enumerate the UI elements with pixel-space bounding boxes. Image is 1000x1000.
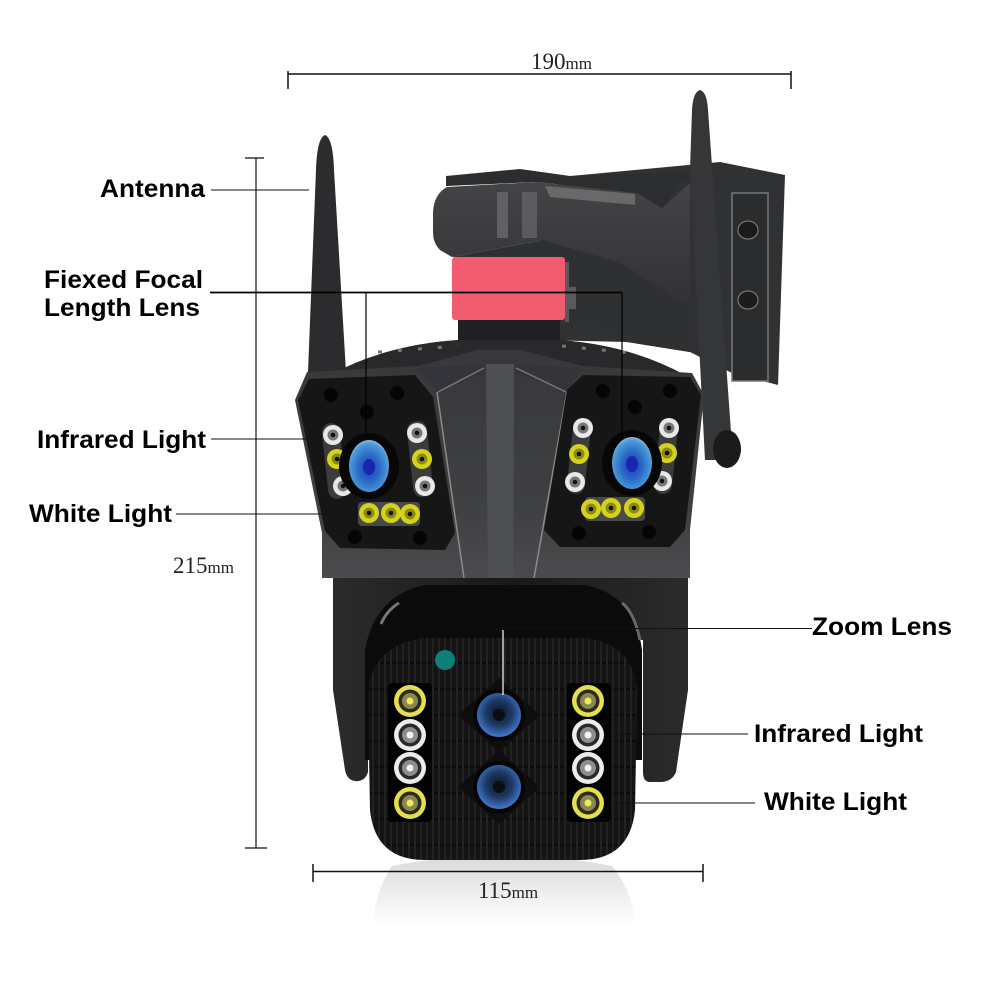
callout: white light left: White Light [29,500,173,528]
right panel screw holes [572,384,677,540]
callout: zoom lens: Zoom Lens [812,613,952,641]
reflection under camera [372,856,636,925]
pink label block [452,257,565,320]
callout: infrared light right: Infrared Light [754,720,924,748]
lower pan housing [333,578,688,782]
antenna knob [713,430,741,468]
status indicator [435,650,455,670]
main gray head body [295,350,704,578]
left LED strip [388,683,432,822]
right panel side LEDs [565,417,679,495]
callout: fixed focal length lens: Fiexed Focal [44,266,203,294]
screw beside pink block [565,262,576,322]
callout: antenna: Antenna [100,175,206,203]
dimension: height 215mm [173,158,267,848]
right panel bottom LEDs [581,497,645,521]
callout: fixed focal length lens [44,266,622,436]
left panel bottom LEDs [358,502,420,526]
left panel screw holes [324,386,427,545]
zoom head front plate [368,638,637,860]
top zoom lens [458,678,540,752]
right lens [602,430,662,496]
callout: fixed focal length lens: Length Lens [44,294,200,322]
dimension: width 115mm [313,864,703,903]
dimension: width 190mm [288,49,791,89]
callout: infrared light left: Infrared Light [37,426,207,454]
callout: white light right: White Light [764,788,908,816]
dimension: width 190mm: 190mm [531,49,592,74]
right LED strip [567,683,611,822]
center ridge [418,364,583,578]
dome top and neck [330,320,685,375]
left antenna [308,135,346,372]
dimension: width 115mm: 115mm [478,878,538,903]
right antenna [690,90,733,460]
dimension: height 215mm: 215mm [173,553,234,578]
wall mount bracket [433,162,785,385]
bottom zoom lens [458,750,540,824]
left lens panel [298,375,455,550]
left panel side LEDs [321,420,435,500]
left lens [339,433,399,499]
right lens panel [544,375,701,547]
